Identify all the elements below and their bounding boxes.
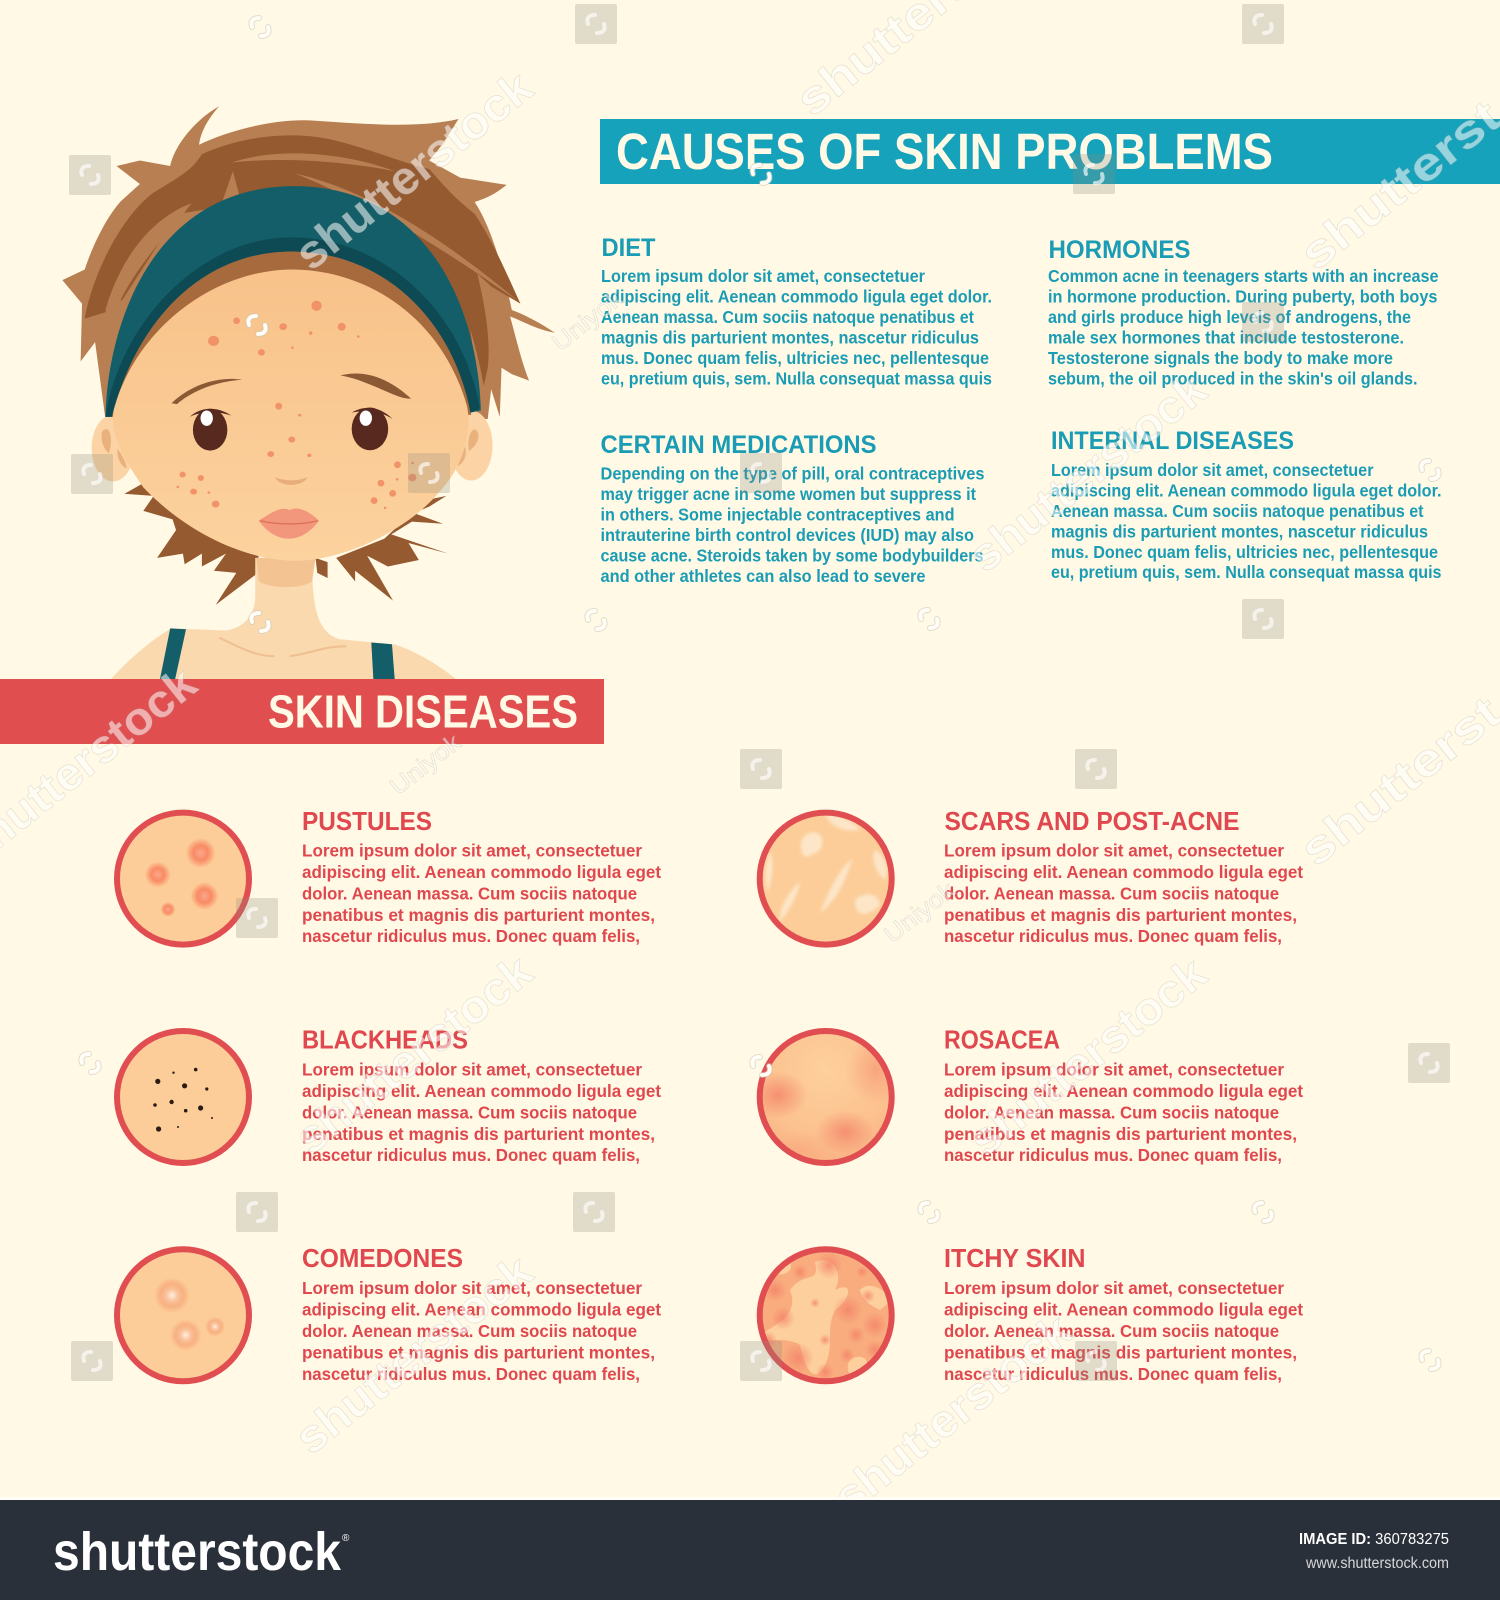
hairline under headband — [111, 250, 471, 417]
disease text: itchy skin: dolor. Aenean massa. Cum sociis natoque — [944, 1321, 1279, 1341]
skin icon: rosacea — [756, 1028, 895, 1166]
disease text: rosacea: dolor. Aenean massa. Cum sociis natoque — [944, 1102, 1279, 1122]
disease text: scars and post-acne — [944, 808, 1303, 946]
skin icon: comedones — [117, 1249, 249, 1381]
cause: internal diseases: Aenean massa. Cum sociis natoque penatibus et — [1051, 501, 1424, 521]
cause: hormones: HORMONES — [1048, 236, 1190, 264]
face — [113, 269, 468, 561]
cause: diet: mus. Donec quam felis, ultricies nec, pellentesque — [601, 348, 989, 368]
neck and shoulders — [111, 558, 457, 680]
disease text: blackheads: penatibus et magnis dis parturient montes, — [302, 1124, 655, 1144]
stock watermark overlay: Uniyok — [879, 876, 961, 949]
cause: certain medications: intrauterine birth control devices (IUD) may also — [600, 525, 974, 545]
cause: certain medications: cause acne. Steroids taken by some bodybuilders — [600, 546, 984, 566]
illustration: girl with acne — [62, 106, 555, 680]
disease text: rosacea: adipiscing elit. Aenean commodo ligula eget — [944, 1081, 1303, 1101]
cause: internal diseases: mus. Donec quam felis, ultricies nec, pellentesque — [1051, 542, 1438, 562]
cause: diet: DIET — [602, 234, 656, 262]
cause: diet — [601, 234, 992, 388]
disease text: blackheads: Lorem ipsum dolor sit amet, consectetuer — [302, 1060, 642, 1080]
disease text: scars and post-acne: penatibus et magnis dis parturient montes, — [944, 905, 1297, 925]
disease text: rosacea: ROSACEA — [944, 1026, 1060, 1054]
disease text: comedones: adipiscing elit. Aenean commodo ligula eget — [302, 1300, 661, 1320]
disease text: comedones: penatibus et magnis dis parturient montes, — [302, 1342, 655, 1362]
cause: hormones: and girls produce high levels of androgens, the — [1048, 307, 1411, 327]
stock watermark overlay: shutterstock — [824, 1303, 1081, 1523]
disease text: pustules: penatibus et magnis dis parturient montes, — [302, 905, 655, 925]
banner: skin diseases: SKIN DISEASES — [268, 686, 578, 738]
disease text: pustules: nascetur ridiculus mus. Donec quam felis, — [302, 926, 640, 946]
disease text: blackheads: BLACKHEADS — [302, 1026, 468, 1054]
disease text: rosacea: penatibus et magnis dis parturient montes, — [944, 1124, 1297, 1144]
footer logo: shutterstock — [53, 1522, 342, 1582]
disease text: scars and post-acne: nascetur ridiculus mus. Donec quam felis, — [944, 926, 1282, 946]
disease text: blackheads: nascetur ridiculus mus. Donec quam felis, — [302, 1145, 640, 1165]
left eye — [190, 409, 231, 451]
website: www.shutterstock.com — [1305, 1555, 1449, 1572]
skin icon: blackheads — [117, 1031, 249, 1163]
disease text: comedones: nascetur ridiculus mus. Donec quam felis, — [302, 1364, 640, 1384]
cause: certain medications: CERTAIN MEDICATIONS — [600, 431, 876, 459]
cause: diet: Aenean massa. Cum sociis natoque penatibus et — [601, 307, 974, 327]
disease text: pustules: dolor. Aenean massa. Cum sociis natoque — [302, 884, 637, 904]
stock watermark overlay: shutterstock — [959, 362, 1216, 582]
cause: diet: Lorem ipsum dolor sit amet, consectetuer — [601, 266, 925, 286]
stock watermark overlay: Uniyok — [547, 284, 629, 357]
disease text: blackheads: adipiscing elit. Aenean commodo ligula eget — [302, 1081, 661, 1101]
acne spots — [176, 301, 416, 509]
disease text: comedones: COMEDONES — [302, 1245, 463, 1273]
cause: diet: magnis dis parturient montes, nascetur ridiculus — [601, 328, 979, 348]
disease text: scars and post-acne: Lorem ipsum dolor sit amet, consectetuer — [944, 840, 1284, 860]
banner: causes of skin problems: CAUSES OF SKIN PROBLEMS — [616, 123, 1273, 180]
disease text: comedones — [302, 1245, 661, 1384]
collar bones — [219, 638, 347, 656]
disease text: blackheads — [302, 1026, 661, 1165]
disease text: rosacea — [944, 1026, 1303, 1165]
lips — [259, 509, 319, 539]
disease text: pustules: adipiscing elit. Aenean commodo ligula eget — [302, 862, 661, 882]
cause: diet: eu, pretium quis, sem. Nulla consequat massa quis — [601, 368, 992, 388]
disease text: scars and post-acne: SCARS AND POST-ACNE — [944, 808, 1240, 836]
disease text: scars and post-acne: dolor. Aenean massa. Cum sociis natoque — [944, 884, 1279, 904]
stock watermark overlay: shutterst — [1290, 686, 1500, 876]
disease text: rosacea: nascetur ridiculus mus. Donec quam felis, — [944, 1145, 1282, 1165]
ears — [92, 410, 493, 481]
cause: internal diseases: eu, pretium quis, sem. Nulla consequat massa quis — [1051, 562, 1442, 582]
stock watermark overlay: shutterstock — [285, 60, 542, 280]
cause: certain medications: and other athletes can also lead to severe — [600, 566, 926, 586]
disease text: itchy skin: ITCHY SKIN — [944, 1245, 1086, 1273]
cause: hormones: in hormone production. During puberty, both boys — [1048, 286, 1438, 306]
disease text: pustules: PUSTULES — [302, 808, 432, 836]
eyebrows — [172, 373, 411, 404]
disease text: itchy skin: adipiscing elit. Aenean commodo ligula eget — [944, 1300, 1303, 1320]
cause: diet: adipiscing elit. Aenean commodo ligula eget dolor. — [601, 286, 992, 306]
banner: skin diseases — [0, 679, 604, 744]
stock watermark overlay: shutterstock — [285, 1244, 542, 1464]
cause: certain medications: may trigger acne in some women but suppress it — [600, 484, 976, 504]
disease text: comedones: Lorem ipsum dolor sit amet, consectetuer — [302, 1278, 642, 1298]
cause: hormones: male sex hormones that include testosterone. — [1048, 328, 1404, 348]
disease text: itchy skin: Lorem ipsum dolor sit amet, consectetuer — [944, 1278, 1284, 1298]
cause: internal diseases: magnis dis parturient montes, nascetur ridiculus — [1051, 522, 1428, 542]
cause: internal diseases — [1051, 427, 1442, 582]
nose — [275, 477, 307, 485]
cause: hormones: Testosterone signals the body to make more — [1048, 348, 1393, 368]
cause: internal diseases: Lorem ipsum dolor sit amet, consectetuer — [1051, 460, 1374, 480]
hair: light back layer — [62, 106, 555, 419]
stock watermark overlay: Uniyok — [385, 728, 467, 801]
disease text: pustules — [302, 808, 661, 946]
hair: lower strands behind face — [124, 483, 448, 605]
hair: dark strands — [85, 135, 520, 415]
disease text: scars and post-acne: adipiscing elit. Aenean commodo ligula eget — [944, 862, 1303, 882]
disease text: itchy skin: nascetur ridiculus mus. Donec quam felis, — [944, 1364, 1282, 1384]
disease text: itchy skin: penatibus et magnis dis parturient montes, — [944, 1342, 1297, 1362]
cause: internal diseases: adipiscing elit. Aenean commodo ligula eget dolor. — [1051, 480, 1442, 500]
disease text: rosacea: Lorem ipsum dolor sit amet, consectetuer — [944, 1060, 1284, 1080]
stock watermark overlay: shutterstock — [959, 946, 1216, 1166]
disease text: pustules: Lorem ipsum dolor sit amet, consectetuer — [302, 840, 642, 860]
disease text: comedones: dolor. Aenean massa. Cum sociis natoque — [302, 1321, 637, 1341]
right eye — [352, 407, 393, 450]
cause: hormones — [1048, 236, 1439, 388]
cause: hormones: Common acne in teenagers starts with an increase — [1048, 266, 1439, 286]
cause: certain medications: in others. Some injectable contraceptives and — [600, 504, 954, 524]
skin icon: pustules — [117, 813, 249, 945]
stock watermark overlay: shutterstock — [285, 944, 542, 1164]
cause: hormones: sebum, the oil produced in the skin's oil glands. — [1048, 368, 1418, 388]
cause: certain medications: Depending on the type of pill, oral contraceptives — [600, 464, 985, 484]
footer bar — [0, 1497, 1500, 1600]
disease text: itchy skin — [944, 1245, 1303, 1384]
top straps — [160, 628, 395, 680]
disease text: blackheads: dolor. Aenean massa. Cum sociis natoque — [302, 1102, 637, 1122]
skin icon: scars and post-acne — [760, 813, 892, 945]
headband — [105, 186, 481, 417]
image id: IMAGE ID: 360783275 — [1299, 1531, 1449, 1548]
skin icon: itchy skin — [759, 1249, 892, 1381]
footer logo: ® — [342, 1533, 350, 1544]
hair: light streaks — [105, 119, 519, 415]
stock watermark overlay: shutterst — [1290, 90, 1500, 280]
cause: certain medications — [600, 431, 985, 586]
neck shadow — [256, 558, 316, 587]
cause: internal diseases: INTERNAL DISEASES — [1051, 427, 1294, 455]
